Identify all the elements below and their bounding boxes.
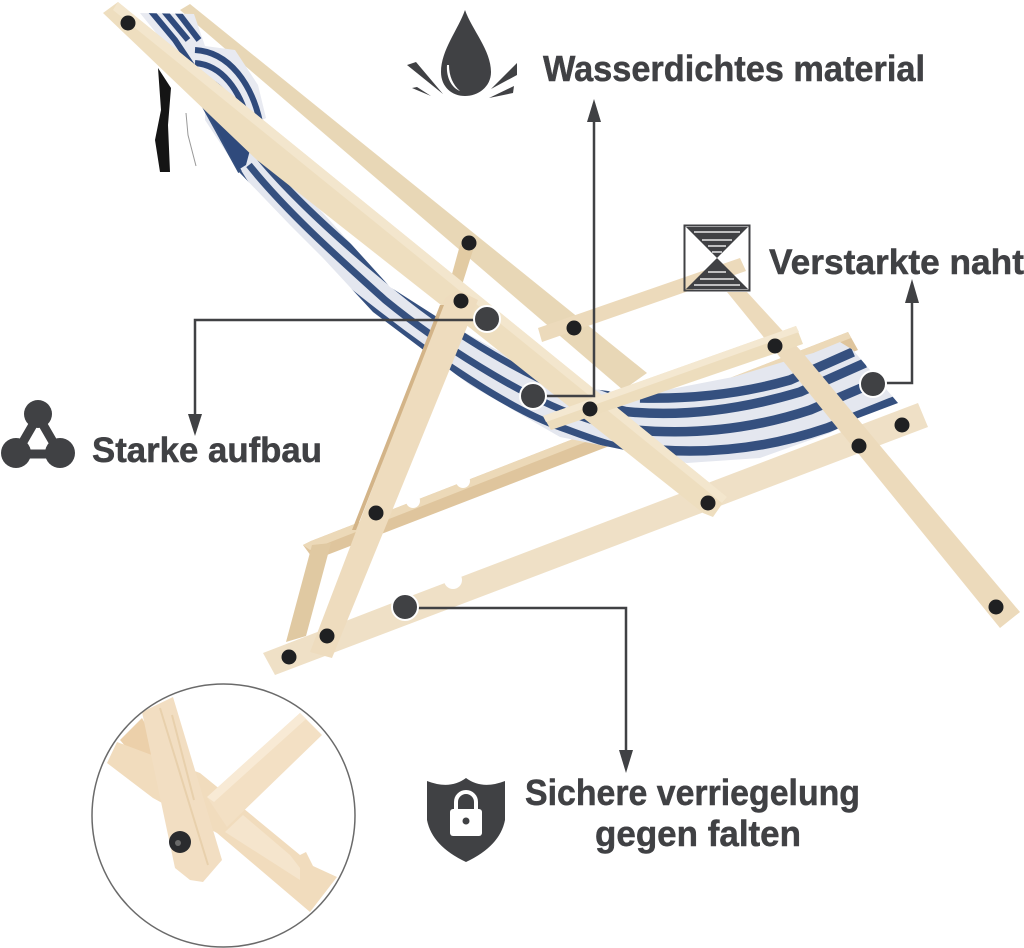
icon: water drop bbox=[407, 10, 517, 98]
back rail bbox=[180, 4, 647, 390]
bottom seat bar bbox=[263, 403, 928, 675]
right long rail bbox=[727, 292, 1020, 628]
front bar bbox=[142, 697, 222, 882]
heading: Sichere verriegelung gegen falten bbox=[525, 772, 860, 854]
heading: Sichere verriegelung gegen falten: Sichere verriegelung bbox=[525, 772, 860, 813]
heading: Verstarkte naht: Verstarkte naht bbox=[769, 243, 1024, 282]
front leg bbox=[310, 290, 478, 658]
rear connector bbox=[286, 543, 331, 642]
heading: Sichere verriegelung gegen falten: gegen falten bbox=[595, 813, 801, 854]
seat fabric bbox=[140, 10, 898, 463]
short back strut bbox=[449, 245, 473, 285]
bolt bbox=[169, 831, 191, 853]
icon: lock shield bbox=[427, 778, 505, 862]
rear seat bar bbox=[303, 332, 858, 560]
callout line: Sichere verriegelung bbox=[392, 594, 633, 773]
pillow bbox=[140, 10, 266, 127]
callout line: Verstarkte naht bbox=[860, 279, 919, 397]
inset detail circle bbox=[92, 684, 355, 947]
icon: hourglass seam bbox=[684, 226, 750, 290]
lower headrest section bbox=[196, 92, 240, 172]
rear arm crossbar bbox=[538, 258, 746, 342]
armrest bar bbox=[543, 326, 803, 430]
heading: Wasserdichtes material: Wasserdichtes material bbox=[543, 48, 925, 89]
heading: Starke aufbau: Starke aufbau bbox=[92, 431, 322, 470]
deck chair bbox=[103, 2, 1020, 675]
callout line: Starke aufbau bbox=[188, 306, 500, 436]
icon: connected nodes bbox=[1, 400, 75, 468]
thin string bbox=[186, 113, 196, 166]
strap bbox=[155, 68, 171, 172]
front long rail bbox=[103, 2, 727, 517]
headrest pad bbox=[203, 103, 250, 170]
callout line: Wasserdichtes material bbox=[520, 99, 601, 409]
bolts bbox=[120, 16, 1004, 664]
rear shadow piece bbox=[120, 718, 151, 755]
round dowel bbox=[218, 713, 322, 810]
lower bar bbox=[107, 742, 337, 912]
